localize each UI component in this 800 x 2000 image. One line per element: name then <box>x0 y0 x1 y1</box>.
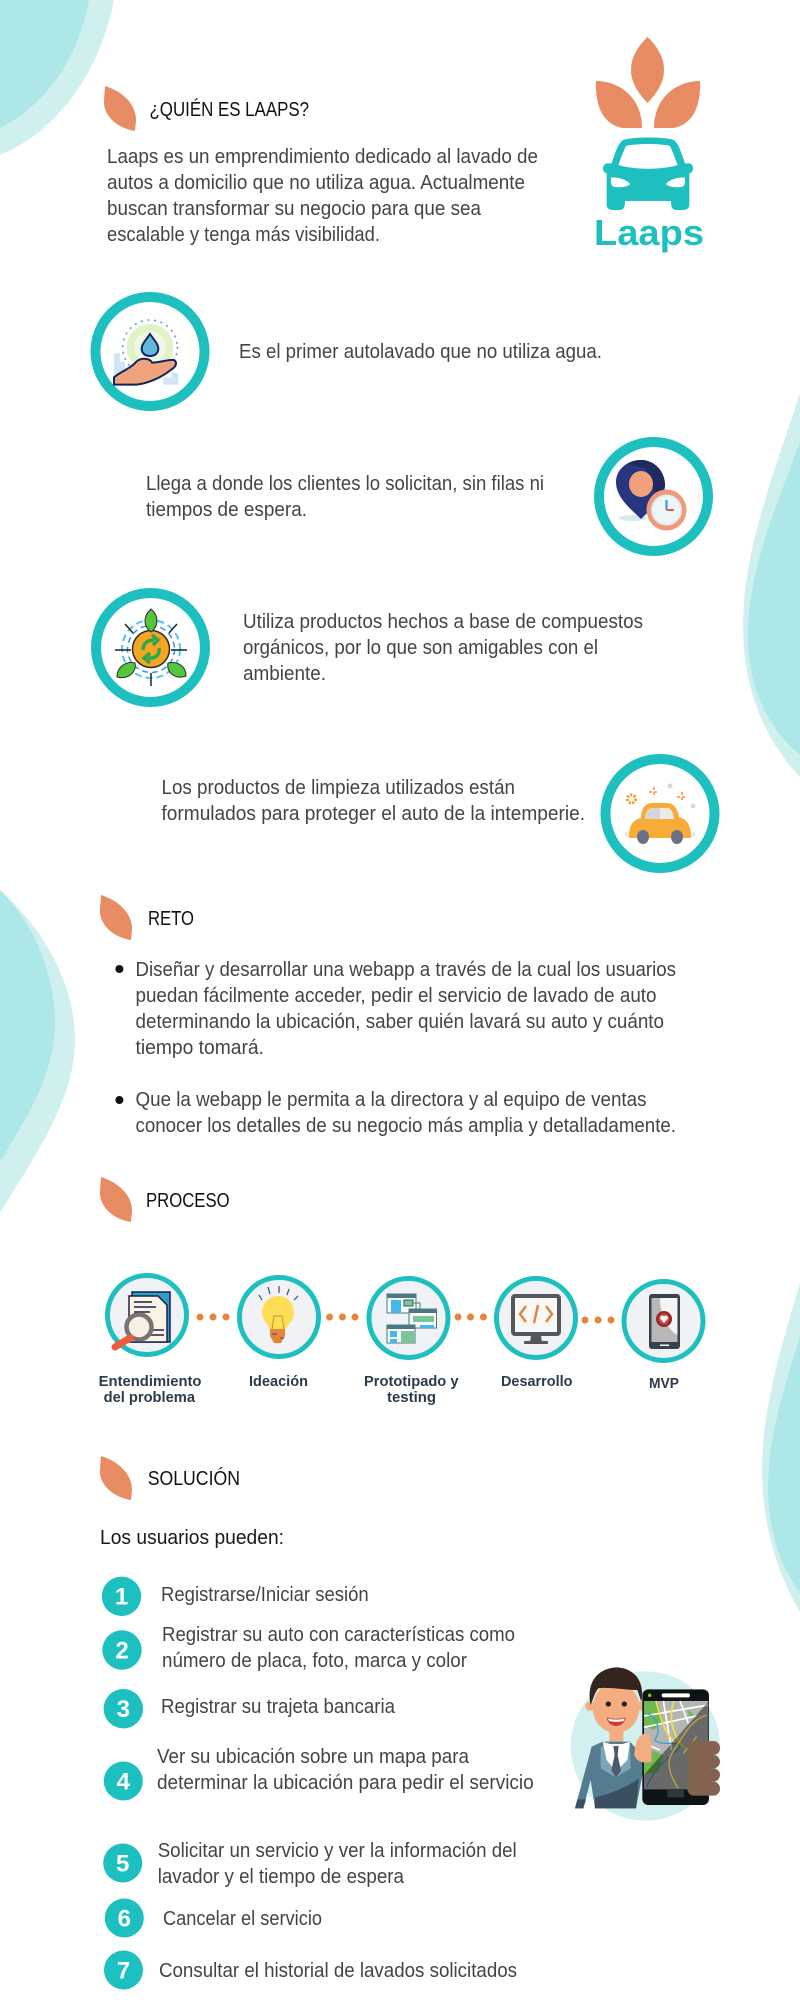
heading: proceso: PROCESO <box>146 1190 230 1212</box>
list item 6 <box>105 1898 322 1938</box>
icon: leaf <box>100 1177 132 1222</box>
feature: car protection <box>162 759 714 868</box>
feature: no water <box>96 297 602 406</box>
background blob: top left <box>0 0 114 155</box>
list item 3 <box>104 1689 396 1728</box>
background blob: right upper <box>743 393 800 777</box>
logo wordmark: Laaps <box>594 212 704 253</box>
list item 3: Registrar su trajeta bancaria <box>161 1696 396 1718</box>
text block: intro: autos a domicilio que no utiliza agua. Actualmente <box>107 172 525 194</box>
section: solución <box>100 1456 534 1990</box>
text: location: tiempos de espera. <box>146 499 307 521</box>
list item 2 <box>102 1624 515 1672</box>
process step: MVP: MVP <box>649 1376 679 1392</box>
list item 7 <box>104 1950 517 1990</box>
icon: logo leaves <box>596 37 700 128</box>
list item 6: 6 <box>118 1906 131 1932</box>
section: reto <box>100 895 676 1137</box>
list item 4: 4 <box>117 1768 131 1796</box>
process step: prototipado: Prototipado y <box>364 1374 458 1390</box>
text: car protection: formulados para proteger el auto de la intemperie. <box>162 803 585 825</box>
list item 3: 3 <box>117 1696 130 1723</box>
text block: intro: Laaps es un emprendimiento dedicado al lavado de <box>107 146 538 168</box>
text block: intro: buscan transformar su negocio para que sea <box>107 198 482 220</box>
text: organic products: orgánicos, por lo que son amigables con el <box>243 637 598 659</box>
icon: leaf <box>100 895 132 940</box>
heading: reto: RETO <box>148 908 194 930</box>
process step: ideación: Ideación <box>249 1374 308 1390</box>
list item 5: 5 <box>116 1850 129 1878</box>
icon: logo car <box>603 137 693 210</box>
bullet: webapp for directors: conocer los detalles de su negocio más amplia y detalladamente. <box>136 1115 676 1137</box>
section: quién es Laaps <box>104 86 538 246</box>
list item 6: Cancelar el servicio <box>163 1908 322 1930</box>
feature: on demand location <box>146 442 708 551</box>
icon: shiny orange car <box>606 759 714 868</box>
list item 4 <box>104 1746 534 1800</box>
connector dots <box>454 1314 487 1320</box>
text: organic products: Utiliza productos hechos a base de compuestos <box>243 611 643 633</box>
list item 5: Solicitar un servicio y ver la información del <box>158 1840 517 1862</box>
list item 4: determinar la ubicación para pedir el servicio <box>157 1772 534 1794</box>
illustration: man holding phone with map <box>571 1667 720 1821</box>
text: intro list: Los usuarios pueden: <box>100 1527 284 1549</box>
background blob: right lower <box>762 1283 800 1612</box>
text: location: Llega a donde los clientes lo solicitan, sin filas ni <box>146 473 544 495</box>
list item 1: 1 <box>115 1584 128 1610</box>
list item 4: Ver su ubicación sobre un mapa para <box>157 1746 470 1768</box>
list item 5: lavador y el tiempo de espera <box>158 1866 405 1888</box>
bullet: webapp for users: tiempo tomará. <box>136 1037 264 1059</box>
icon: leaf <box>100 1456 132 1500</box>
text: organic products: ambiente. <box>243 663 326 685</box>
process step: entendimiento <box>99 1276 202 1406</box>
process step: prototipado: testing <box>387 1390 436 1406</box>
bullet: webapp for users: puedan fácilmente acceder, pedir el servicio de lavado de auto <box>136 985 656 1007</box>
bullet: webapp for directors <box>115 1089 676 1137</box>
logo: Laaps <box>594 37 704 253</box>
text: no water: Es el primer autolavado que no utiliza agua. <box>239 341 602 363</box>
background blob: left middle <box>0 890 75 1213</box>
connector dots <box>196 1314 230 1320</box>
bullet: webapp for users: Diseñar y desarrollar una webapp a través de la cual los usuarios <box>136 959 676 981</box>
list item 7: Consultar el historial de lavados solicitados <box>159 1960 517 1982</box>
heading: solución: SOLUCIÓN <box>148 1467 240 1490</box>
bullet: webapp for users: determinando la ubicación, saber quién lavará su auto y cuánto <box>136 1011 664 1033</box>
list item 5 <box>103 1840 517 1888</box>
icon: leaf <box>104 86 136 131</box>
process step: ideación <box>240 1278 318 1390</box>
process step: prototipado <box>364 1278 458 1406</box>
icon: hand with water drop <box>96 297 204 406</box>
process step: desarrollo: Desarrollo <box>501 1374 573 1390</box>
feature: organic products <box>96 593 643 702</box>
process step: MVP <box>624 1282 703 1392</box>
process step: entendimiento: Entendimiento <box>99 1374 202 1390</box>
list item 2: 2 <box>115 1638 129 1664</box>
text block: intro: escalable y tenga más visibilidad. <box>107 224 380 246</box>
process step: entendimiento: del problema <box>104 1390 196 1406</box>
icon: recycling globe with leaves <box>96 593 205 702</box>
list item 2: Registrar su auto con características como <box>162 1624 515 1646</box>
bullet: webapp for users <box>115 959 676 1059</box>
section: proceso <box>99 1177 703 1406</box>
text: car protection <box>162 777 585 825</box>
connector dots <box>582 1316 614 1324</box>
bullet: webapp for directors: Que la webapp le permita a la directora y al equipo de ventas <box>136 1089 646 1111</box>
list item 1: Registrarse/Iniciar sesión <box>161 1584 369 1606</box>
process step: desarrollo <box>496 1278 576 1390</box>
list item 7: 7 <box>117 1958 130 1984</box>
list item 1 <box>102 1577 369 1616</box>
text: location <box>146 473 544 521</box>
text block: intro <box>107 146 538 246</box>
connector dots <box>326 1314 358 1320</box>
text: organic products <box>243 611 643 685</box>
icon: map pin and clock <box>599 442 708 551</box>
heading: quién es Laaps: ¿QUIÉN ES LAAPS? <box>150 98 309 121</box>
text: car protection: Los productos de limpieza utilizados están <box>162 777 515 799</box>
list item 2: número de placa, foto, marca y color <box>162 1650 467 1672</box>
